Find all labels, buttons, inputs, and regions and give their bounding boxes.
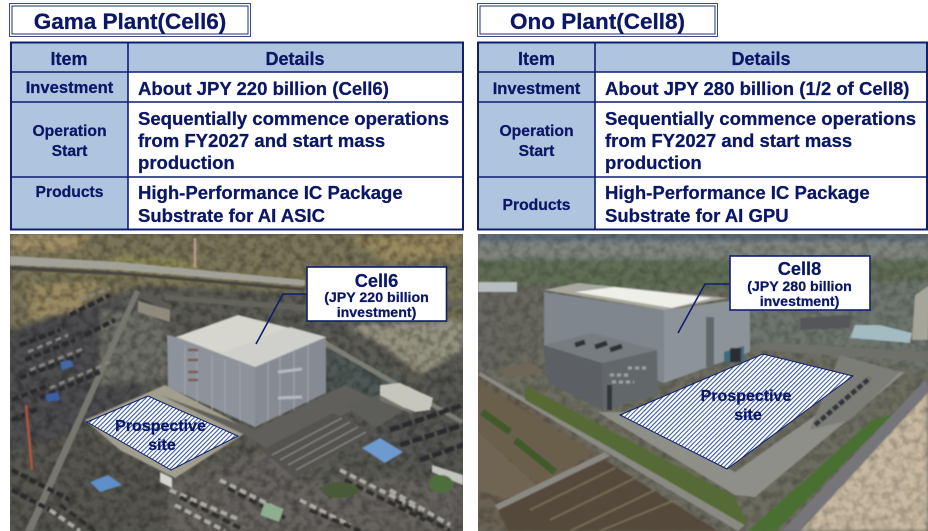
far road on right	[782, 380, 928, 531]
photo grain	[10, 234, 463, 531]
header: Item: Item	[518, 49, 555, 69]
photo: Ono plant aerial view	[478, 234, 928, 531]
title: Ono Plant	[478, 4, 718, 36]
callout: Cell8: investment)	[760, 294, 840, 310]
white building far left	[478, 282, 517, 292]
header: Details: Details	[265, 49, 325, 69]
value: operation start: production	[138, 152, 235, 173]
header: Details: Details	[731, 49, 791, 69]
title: Ono Plant: Ono Plant(Cell8)	[510, 9, 685, 34]
canal road	[478, 372, 745, 531]
label: Operation Start: Operation	[499, 123, 574, 140]
callout: Cell6	[307, 267, 446, 321]
main factory	[544, 292, 664, 383]
highway	[10, 256, 305, 286]
leader line: Cell8	[678, 284, 729, 333]
annex	[543, 333, 657, 363]
green strip	[525, 385, 748, 527]
plaza around site	[85, 385, 250, 478]
apartment block	[138, 301, 170, 322]
green trees	[429, 475, 453, 493]
callout: Cell8: (JPY 280 billion	[747, 279, 852, 295]
value: investment: About JPY 220 billion (Cell6)	[138, 78, 389, 99]
callout: Cell6: investment)	[337, 305, 417, 321]
factory side	[380, 383, 433, 412]
label: Operation Start: Start	[519, 143, 555, 160]
roads	[25, 290, 140, 531]
red tower	[26, 405, 32, 470]
value: products: Substrate for AI ASIC	[138, 205, 325, 226]
title: Gama Plant	[10, 4, 250, 36]
header: Item: Item	[50, 49, 88, 69]
factory building	[167, 335, 255, 427]
value: operation start: Sequentially commence operations	[605, 108, 916, 129]
parking lot	[268, 414, 368, 475]
prospective site: Gama: site	[148, 437, 176, 454]
value: operation start: from FY2027 and start mass	[138, 130, 385, 151]
prospective site: Ono: site	[734, 407, 762, 424]
callout: Cell8: Cell8	[778, 259, 821, 279]
photo: Gama plant aerial view	[10, 234, 463, 531]
table: Gama Plant details	[11, 42, 463, 230]
photo grain	[478, 234, 928, 531]
label: Operation Start: Operation	[32, 123, 107, 140]
callout: Cell8	[730, 256, 870, 310]
value: operation start: from FY2027 and start mass	[605, 130, 852, 151]
value: products: High-Performance IC Package	[605, 182, 870, 203]
value: investment: About JPY 280 billion (1/2 of Cell8)	[605, 78, 909, 99]
water pond	[850, 325, 912, 343]
houses	[12, 295, 115, 510]
buildings	[800, 315, 850, 330]
prospective site: Ono: Prospective	[701, 388, 791, 405]
prospective site: Gama: Prospective	[115, 418, 206, 435]
road around the site	[598, 370, 905, 497]
title: Gama Plant: Gama Plant(Cell6)	[34, 9, 226, 34]
tree line	[482, 412, 555, 472]
label: Investment: Investment	[26, 78, 114, 97]
label: Products: Products	[36, 184, 104, 201]
value: products: Substrate for AI GPU	[605, 205, 789, 226]
prospective site: Ono	[620, 354, 853, 469]
label: Operation Start: Start	[52, 143, 88, 160]
table: Ono Plant details	[478, 42, 928, 230]
fields	[478, 382, 593, 487]
label: Investment: Investment	[493, 79, 581, 98]
callout: Cell6: (JPY 220 billion	[324, 290, 429, 306]
value: products: High-Performance IC Package	[138, 182, 403, 203]
blue roofs	[362, 438, 403, 463]
value: operation start: production	[605, 152, 702, 173]
label: Products: Products	[502, 197, 571, 214]
leader line: Cell6	[256, 294, 306, 344]
value: operation start: Sequentially commence operations	[138, 108, 449, 129]
prospective site: Gama	[87, 396, 238, 470]
callout: Cell6: Cell6	[355, 271, 398, 291]
